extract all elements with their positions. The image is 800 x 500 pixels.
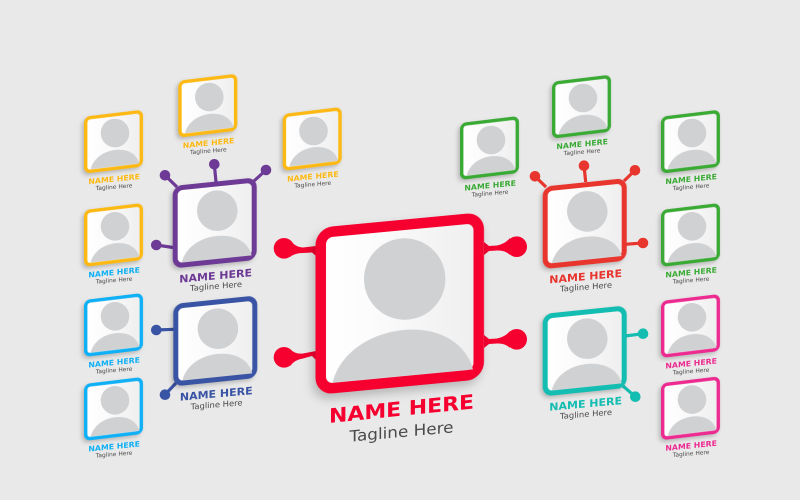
head — [567, 318, 608, 359]
frame — [284, 109, 340, 169]
tagline: Tagline Here — [672, 368, 710, 377]
head — [101, 212, 129, 241]
tagline: Tagline Here — [95, 277, 133, 286]
name: NAME HERE — [88, 355, 140, 370]
card: navy with connectors — [151, 298, 255, 412]
card: blue lower — [86, 379, 141, 460]
tagline: Tagline Here — [559, 408, 612, 421]
frame — [176, 298, 255, 384]
card: blue upper — [86, 295, 141, 376]
name: NAME HERE — [549, 395, 622, 414]
card: yellow left lower — [86, 205, 141, 286]
card: yellow top — [180, 76, 236, 156]
frame — [175, 180, 254, 266]
frame — [86, 205, 141, 265]
name: NAME HERE — [464, 179, 516, 193]
frame — [663, 205, 718, 265]
frame — [86, 112, 141, 172]
card: green left — [462, 118, 517, 199]
frame — [545, 308, 624, 394]
name: NAME HERE — [183, 136, 234, 150]
connectors — [274, 236, 527, 368]
connectors — [530, 160, 648, 248]
tagline: Tagline Here — [190, 398, 243, 412]
tagline: Tagline Here — [95, 367, 133, 376]
name: NAME HERE — [665, 265, 717, 280]
head — [678, 385, 706, 414]
head — [197, 190, 238, 231]
head — [101, 386, 129, 415]
frame — [545, 181, 624, 266]
name: NAME HERE — [88, 439, 140, 454]
tagline: Tagline Here — [189, 280, 242, 293]
head — [198, 308, 238, 349]
head — [569, 84, 597, 112]
name: NAME HERE — [179, 267, 252, 286]
frame — [663, 296, 718, 356]
tagline: Tagline Here — [672, 450, 710, 459]
tagline: Tagline Here — [471, 190, 509, 199]
card: green top — [554, 77, 609, 157]
frame — [462, 118, 517, 178]
frame — [554, 77, 609, 137]
frame — [321, 218, 479, 389]
card: pink lower — [663, 378, 718, 459]
name: NAME HERE — [329, 390, 474, 428]
name: NAME HERE — [88, 172, 140, 186]
connectors — [623, 328, 648, 402]
head — [299, 117, 328, 145]
name: NAME HERE — [556, 137, 608, 151]
card: teal with connectors — [545, 308, 648, 421]
name: NAME HERE — [665, 439, 717, 453]
connectors — [151, 159, 271, 250]
head — [101, 302, 129, 331]
connectors — [151, 325, 176, 400]
head — [364, 238, 445, 320]
frame — [180, 76, 236, 136]
main card: crimson leader — [274, 218, 527, 446]
frame — [86, 295, 141, 355]
card: pink upper — [663, 296, 718, 377]
tagline: Tagline Here — [672, 183, 710, 192]
card: green right upper — [663, 112, 718, 192]
frame — [86, 379, 141, 439]
name: NAME HERE — [665, 356, 717, 371]
tagline: Tagline Here — [559, 281, 612, 294]
tagline: Tagline Here — [95, 451, 133, 460]
name: NAME HERE — [287, 170, 339, 184]
head — [477, 126, 505, 154]
tagline: Tagline Here — [293, 181, 332, 190]
head — [101, 119, 129, 147]
tagline: Tagline Here — [95, 183, 133, 192]
name: NAME HERE — [88, 265, 140, 280]
name: NAME HERE — [180, 385, 253, 404]
head — [195, 83, 224, 111]
head — [678, 119, 706, 147]
tagline: Tagline Here — [563, 148, 601, 157]
tagline: Tagline Here — [348, 418, 454, 446]
card: purple with connectors — [151, 159, 271, 293]
card: yellow left upper — [86, 112, 141, 192]
card: red with connectors — [530, 160, 648, 294]
frame — [663, 112, 718, 172]
frame — [663, 378, 718, 438]
head — [567, 191, 608, 232]
card: yellow right — [284, 109, 340, 190]
head — [678, 303, 706, 332]
name: NAME HERE — [549, 268, 622, 286]
head — [678, 212, 706, 241]
name: NAME HERE — [665, 172, 717, 186]
tagline: Tagline Here — [672, 277, 710, 286]
card: green right lower — [663, 205, 718, 286]
tagline: Tagline Here — [189, 147, 227, 156]
